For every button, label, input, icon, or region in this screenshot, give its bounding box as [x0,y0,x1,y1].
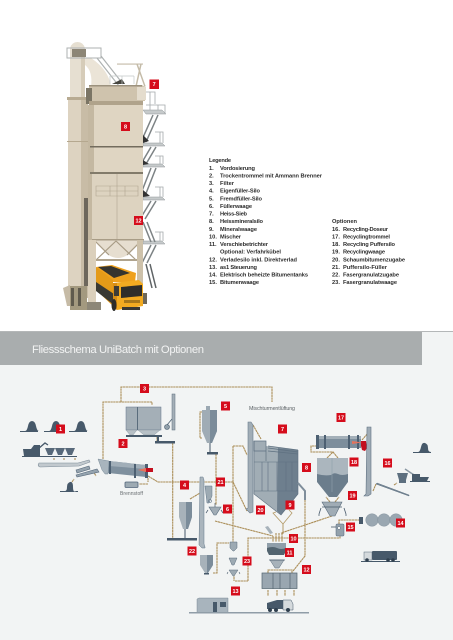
legend: main list: Elektrisch beheizte Bitumentanks [220,272,308,278]
icon: bucket elevator 21 [199,477,212,548]
marker 4: 4 [183,483,187,489]
legend: main list [209,158,323,286]
legend: main list: Eigenfüller-Silo [220,189,261,195]
legend: main list: 7. [209,212,214,218]
legend: options list: Recyclingwaage [343,250,385,256]
marker 11: 11 [287,550,292,556]
elevator column [63,42,90,310]
flow lines [54,387,397,596]
marker 14: 14 [397,521,404,527]
icon: mixer and chute [265,526,286,568]
marker 1 [56,424,65,434]
silo body [86,85,146,310]
legend: options list: Recycling-Doseur [343,227,389,233]
title: Fliessschema UniBatch mit Optionen [32,344,204,356]
burner [146,468,153,472]
legend: main list: 3. [209,181,214,187]
marker 8 [302,463,311,472]
legend: main list: Heissmineralsilo [220,219,264,225]
legend: options list: 16. [332,227,340,233]
marker 23: 23 [244,559,250,565]
stockpile: recycling feed [60,482,78,492]
legend: options list: Optionen [332,219,358,225]
legend: main list: 12. [209,257,217,263]
icon: dryer drum [98,459,153,478]
legend: main list: 4. [209,189,214,195]
label: Mischturmentlüftung: Mischturmentlüftung [249,406,295,412]
marker 10: 10 [290,536,297,542]
marker 9 [286,500,294,510]
marker 20: 20 [257,508,264,514]
marker 11 [285,548,294,557]
legend: main list: 15. [209,280,217,286]
marker 18: 18 [351,460,357,466]
callout: tower marker 8: 8 [124,124,127,130]
legend: options list: Puffersilo-Füller [343,265,388,271]
callout: tower marker 12 [134,216,143,225]
marker 18 [350,458,358,466]
legend: main list: Füllerwaage [220,204,252,210]
marker 12: 12 [303,568,310,574]
icon: fuel tank [125,482,138,488]
legend: main list: 6. [209,204,214,210]
legend: main list: 5. [209,196,214,202]
legend: options list: Fasergranulatzugabe [343,272,399,278]
marker 15: 15 [347,525,354,531]
marker 7: 7 [281,427,284,433]
legend: options list: Fasergranulatwaage [343,280,397,286]
legend: main list: Optional: Verfahrkübel [220,250,281,256]
legend: main list: Verladesilo inkl. Direktverlad [220,257,298,263]
marker 21 [216,478,225,486]
label: Brennstoff: Brennstoff [120,491,144,497]
marker 17: 17 [338,416,344,422]
icon: recycling buffer silo 18 [317,458,348,497]
marker 16 [383,458,392,468]
legend: main list: 13. [209,265,217,271]
marker 4 [180,480,189,490]
marker 1: 1 [59,427,62,433]
marker 6: 6 [226,507,229,513]
legend: main list: Mischer [220,234,242,240]
legend: main list: Fremdfüller-Silo [220,196,263,202]
marker 19: 19 [349,494,356,500]
legend: main list: Heiss-Sieb [220,212,248,218]
icon: control cabin 13 [197,598,228,613]
marker 2 [118,439,128,448]
legend: options list: 17. [332,234,340,240]
legend: options list: 21. [332,265,340,271]
icon: hot elevator 7 [246,422,253,513]
marker 17 [336,413,346,422]
legend: options list [332,219,405,286]
stairs [140,92,166,288]
marker 13 [231,586,240,596]
callout: tower marker 7 [150,80,159,89]
marker 14 [396,518,405,528]
marker 16: 16 [384,461,391,467]
icon: cold feed with loader [22,443,99,477]
legend: main list: 1. [209,166,214,172]
legend: options list: 23. [332,280,340,286]
top platform and chute [67,48,145,87]
legend: main list: 9. [209,227,214,233]
icon: recycling stockpile and loader [397,443,431,483]
legend: main list: Mineralwaage [220,227,257,233]
icon: silo 4 [167,502,197,540]
icon: bitumen scale 15 and tanks 14 [331,514,402,536]
marker 12 [302,565,311,574]
legend: main list: Legende [209,158,231,164]
marker 3: 3 [143,386,146,392]
legend: main list: Filter [220,181,235,187]
icon: recycling drum 17 [316,435,367,451]
icon: fibre dosing [227,542,240,576]
marker 10 [289,534,298,543]
marker 13: 13 [232,589,239,595]
heading band [0,332,422,365]
legend: main list: Trockentrommel mit Ammann Brenner [220,173,323,179]
legend: main list: Verschiebetrichter [220,242,269,248]
marker 21: 21 [217,480,224,486]
callout: tower marker 8 [121,122,130,131]
legend: main list: as1 Steuerung [220,265,258,271]
flow chart panel background [0,332,453,640]
marker 22 [188,546,196,556]
marker 19 [348,491,357,500]
legend: options list: 18. [332,242,340,248]
icon: filter unit [126,394,175,444]
marker 20 [256,506,265,514]
legend: options list: 22. [332,272,340,278]
legend: main list: 14. [209,272,217,278]
icon: silo 5 [202,406,218,454]
legend: main list: Bitumenwaage [220,280,259,286]
burner [361,441,367,451]
marker 6 [223,504,232,514]
marker 5: 5 [224,404,227,410]
legend: options list: Schaumbitumenzugabe [343,257,405,263]
icon: filler scale 6 [206,500,223,515]
icon: recycling elevator 16 [364,427,409,496]
icon: mixing tower 8/9 [254,441,305,534]
callout: tower marker 7: 7 [153,82,156,88]
plant illustration: UniBatch tower [63,42,166,311]
marker 15 [346,522,355,532]
marker 2: 2 [121,442,125,448]
legend: options list: 20. [332,257,340,263]
icon: bitumen tanker truck [361,551,400,562]
marker 3 [140,384,149,393]
truck [96,265,147,311]
legend: options list: 19. [332,250,340,256]
marker 5 [221,402,230,410]
legend: main list: 11. [209,242,217,248]
legend: options list: Recycling Puffersilo [343,242,396,248]
legend: main list: 8. [209,219,214,225]
numbered markers [56,384,405,596]
ground line with truck [189,600,309,614]
icon: loading silo 12 [262,573,297,589]
icon: silo 22 [200,555,213,574]
stockpiles: aggregate [20,421,88,432]
marker 9: 9 [288,503,292,509]
marker 22: 22 [189,549,195,555]
callout: tower marker 12: 12 [135,218,142,224]
legend: main list: 10. [209,234,217,240]
legend: options list: Recyclingtrommel [343,234,390,240]
icon: recycling scale 19 [318,502,347,516]
marker 8: 8 [305,466,308,472]
legend: main list: 2. [209,173,214,179]
legend: main list: Vordosierung [220,166,256,172]
marker 7 [278,424,287,434]
marker 23 [242,556,252,566]
